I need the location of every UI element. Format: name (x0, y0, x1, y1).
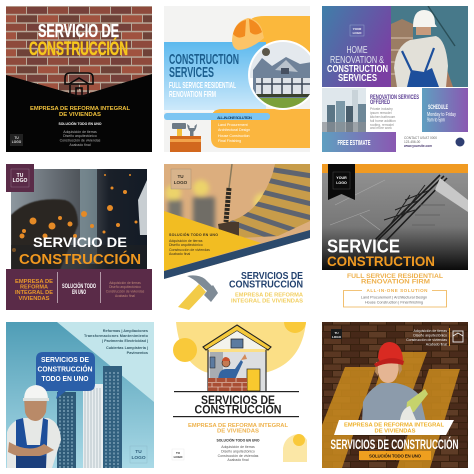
speech bubble: CONSTRUCCIÓN (38, 364, 92, 374)
free estimate block: FREE ESTIMATE (338, 140, 371, 147)
schedule block: 9am to 5pm (427, 118, 445, 124)
gradient title block (322, 6, 391, 87)
blue label strip (164, 113, 270, 120)
column: company: EMPRESA DE (15, 279, 54, 285)
list divider (449, 328, 450, 346)
bottom bar (6, 269, 152, 310)
logo box: TU (177, 174, 184, 179)
services list: Diseño arquitectónico (221, 450, 255, 454)
speech bubble: TODO EN UNO (42, 374, 89, 383)
column: services (106, 281, 145, 298)
skyscrapers (57, 366, 122, 468)
worker with crossed arms (7, 385, 61, 468)
services list: Final Finishing (218, 139, 241, 143)
rule above title (174, 391, 299, 392)
services list: Construcción de viviendas (60, 138, 101, 142)
title (327, 44, 388, 84)
title: CONSTRUCCIÓN (229, 278, 303, 290)
title: CONSTRUCTION (327, 253, 435, 269)
subtitle (347, 273, 443, 286)
contact text: 123-456-00 (404, 140, 421, 144)
subtitle: DE VIVIENDAS (217, 428, 259, 434)
background (6, 322, 154, 468)
logo ribbon (328, 164, 355, 200)
icon: hammer (178, 275, 218, 310)
photo: sparks (11, 169, 147, 270)
icon: house with bricklayer (203, 325, 271, 392)
photo: worker from behind (391, 6, 468, 87)
photo: city skyline (322, 88, 366, 132)
subtitle (169, 82, 236, 97)
services list: Construcción de viviendas (406, 338, 447, 342)
subtitle (231, 292, 303, 302)
services text (84, 329, 149, 355)
bordered solution box: House Construction | Final finishing (365, 300, 423, 304)
title: SERVICIOS DE (201, 393, 275, 407)
title: SERVICIO DE (33, 234, 127, 250)
services text: Pavimentos (127, 351, 148, 355)
logo: LOGO (174, 455, 183, 459)
services text: ipsum remodel (370, 111, 392, 115)
services list: Adquisición de tierras (221, 445, 255, 449)
solution label: SOLUCIÓN TODO EN UNO (216, 438, 260, 442)
black notched lower area (6, 74, 152, 152)
services list: Acabado final (227, 458, 249, 462)
services list: Architectural Design (218, 128, 250, 132)
panel: hammer and yellow triangle (164, 164, 312, 310)
navy band (164, 230, 310, 279)
logo: YOUR (353, 27, 362, 31)
triangle text: Diseño arquitectónico (169, 243, 203, 247)
solution label: ALL-IN-ONE SOLUTION (217, 115, 252, 120)
services list: Acabado final (426, 342, 447, 346)
triangle text: Acabado final (169, 252, 190, 256)
services list (406, 329, 447, 346)
woman in denim shirt (362, 342, 428, 422)
column: services: Adquisición de tierras (109, 281, 141, 285)
column: company: REFORMA (20, 284, 48, 290)
heading: renovation services offered (370, 95, 419, 106)
contact text: CONTACT US/AT 0000 (404, 136, 437, 140)
subtitle (188, 423, 289, 434)
logo (130, 446, 147, 463)
title: SERVICE (327, 236, 400, 256)
services text: full home addition (370, 119, 396, 123)
panel: woman with red helmet (322, 322, 468, 468)
icon: helmet house (453, 331, 463, 342)
services list: Diseño arquitectónico (413, 334, 447, 338)
services text: roofing, remodel (370, 123, 394, 127)
services list (60, 130, 101, 147)
services text: Transformaciones Mantenimiento (84, 334, 149, 338)
dark brick background (322, 322, 468, 468)
schedule block: Monday to Friday (427, 112, 456, 118)
title: HOME (346, 44, 368, 56)
title: SERVICES (338, 72, 377, 84)
title: servicio de construccion (29, 21, 128, 60)
contact text (403, 136, 437, 148)
subtitle: EMPRESA DE REFORMA INTEGRAL (30, 106, 131, 112)
services text: kitchen bathroom (370, 115, 396, 119)
logo box: TU (17, 173, 24, 179)
free estimate block (322, 132, 396, 152)
title: RENOVATION & (330, 54, 384, 66)
panel: crane service construction (322, 164, 468, 307)
services list: Acabado final (69, 143, 91, 147)
logo: TU (135, 449, 142, 455)
photo: house circle (248, 40, 310, 110)
subtitle: FULL SERVICE RESIDENTIAL (169, 80, 236, 90)
column: services: Acabado final (115, 294, 135, 298)
logo ribbon: YOUR (336, 176, 347, 180)
title (169, 54, 238, 77)
column: solution (62, 282, 96, 296)
orange solution label (359, 451, 431, 460)
subtitle: RENOVATION FIRM (361, 278, 430, 286)
photo: blurred workers and rope (164, 164, 312, 274)
logo box: LOGO (174, 180, 188, 185)
title: servicio de construccion: CONSTRUCCIÓN (29, 38, 128, 60)
yellow background shapes (173, 311, 307, 462)
yellow slanted stripes (322, 352, 460, 468)
schedule block (422, 88, 468, 132)
title (19, 234, 141, 268)
title (327, 236, 435, 269)
white subtitle banner (334, 420, 454, 435)
photo: crane over blueprint (322, 173, 468, 270)
triangle text: SOLUCIÓN TODO EN UNO (169, 232, 218, 237)
services list: Adquisición de tierras (63, 130, 97, 134)
logo (350, 25, 364, 36)
solution label: SOLUCIÓN TODO EN UNO (58, 121, 102, 126)
icon: toolbox (170, 123, 201, 152)
logo: LOGO (131, 455, 146, 461)
panel: purple home renovation (322, 6, 468, 152)
blue panel (164, 42, 266, 111)
subtitle: INTEGRAL DE VIVIENDAS (231, 298, 303, 304)
column: solution: EN UNO (72, 289, 86, 296)
services text: Cubiertas Lampisteria | (106, 346, 148, 350)
schedule block: SCHEDULE (428, 105, 448, 111)
logo: LOGO (353, 31, 362, 35)
panel: teal skyscrapers and worker (6, 322, 154, 468)
logo ribbon: LOGO (336, 181, 347, 185)
white subtitle banner: EMPRESA DE REFORMA INTEGRAL (344, 422, 445, 428)
title: servicio de construccion: SERVICIO DE (38, 21, 119, 41)
logo box: LOGO (13, 178, 27, 184)
logo box (171, 169, 191, 189)
panel: welding sparks construction service (6, 164, 152, 310)
triangle text: Adquisición de tierras (169, 239, 203, 243)
services text (370, 107, 396, 130)
column: company: VIVIENDAS (18, 296, 50, 302)
title (194, 393, 282, 416)
column divider left (56, 272, 59, 303)
column: company (15, 279, 54, 302)
services list: Adquisición de tierras (414, 329, 447, 333)
speech bubble (36, 352, 95, 399)
white subtitle banner: DE VIVIENDAS (374, 428, 416, 434)
light corner triangle (57, 322, 154, 402)
logo (172, 449, 184, 460)
icon: hard hat (232, 18, 264, 50)
subtitle: EMPRESA DE REFORMA (235, 292, 303, 298)
triangle text (169, 232, 218, 256)
subtitle (30, 106, 131, 118)
column: solution: SOLUCIÓN TODO (62, 282, 96, 290)
background (164, 6, 310, 152)
panel: house illustration (172, 311, 307, 462)
orange bottom shape (211, 109, 310, 148)
bordered solution box: ALL-IN-ONE SOLUTION (366, 288, 428, 293)
title: SERVICES (169, 64, 214, 81)
column: services: Diseño arquitectónico (109, 285, 141, 289)
orange top shape (252, 16, 310, 53)
panel: brick wall construction service (6, 6, 152, 152)
yellow triangle (164, 211, 261, 271)
orange top bar (322, 164, 468, 173)
subtitle: FULL SERVICE RESIDENTIAL (347, 273, 443, 280)
subtitle: EMPRESA DE REFORMA INTEGRAL (188, 423, 289, 429)
white lower area (182, 238, 310, 274)
logo box (6, 164, 34, 192)
title: CONSTRUCCIÓN (19, 250, 141, 268)
services text: | Pavimento Electricidad | (102, 339, 148, 343)
services list (218, 123, 250, 143)
logo: TU (176, 451, 180, 455)
icon: helmet house (65, 73, 93, 96)
column: services: Construcción de viviendas (106, 290, 145, 294)
brick wall background (6, 6, 152, 96)
bordered solution box: Land Procurement | Architectural Design (361, 296, 427, 300)
speech bubble: SERVICIOS DE (41, 355, 89, 364)
logo: TU (334, 331, 338, 335)
triangle text: Construcción de viviendas (169, 248, 210, 252)
title: SERVICIOS DE (241, 270, 303, 282)
subtitle: RENOVATION FIRM (169, 89, 216, 99)
title: CONSTRUCTION (169, 51, 239, 68)
heading: renovation services offered: OFFERED (370, 100, 390, 106)
services list: Diseño arquitectónico (63, 134, 97, 138)
services list: Land Procurement (218, 123, 248, 127)
services list: Construcción de viviendas (218, 454, 259, 458)
rule below title (173, 416, 299, 417)
logo (331, 329, 342, 339)
services text: Private industry (370, 107, 393, 111)
icon: round badge (456, 138, 464, 146)
heading: renovation services offered: RENOVATION SERVICES (370, 95, 419, 101)
logo: LOGO (332, 335, 342, 339)
panel: blue and orange construction services (164, 6, 318, 152)
column divider right (99, 272, 102, 303)
subtitle: DE VIVIENDAS (59, 112, 101, 118)
services list: House Construction (218, 134, 250, 138)
column: company: INTEGRAL DE (15, 290, 53, 296)
title: CONSTRUCTION (327, 63, 388, 75)
title: CONSTRUCCIÓN (194, 402, 282, 416)
title (229, 272, 303, 288)
services text: and more work (370, 126, 392, 130)
orange solution label: SOLUCIÓN TODO EN UNO (369, 454, 422, 458)
services text: Reformas | Ampliaciones (103, 329, 148, 333)
services list (218, 445, 259, 462)
logo: TU (14, 136, 19, 140)
contact text: www.yoursite.com (403, 144, 432, 148)
bordered solution box (344, 288, 446, 307)
logo: LOGO (12, 140, 22, 144)
white band (164, 110, 214, 112)
logo (10, 134, 23, 146)
